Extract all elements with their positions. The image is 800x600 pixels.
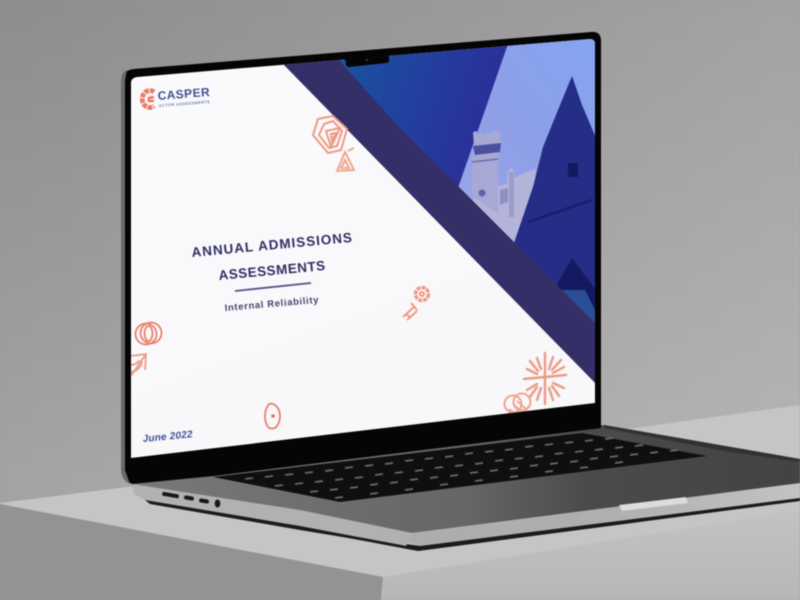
cathedral spire photo	[514, 76, 600, 334]
divider under title	[235, 283, 311, 291]
icon: small triangle	[337, 148, 354, 171]
logo tagline: ACTOR ASSESSMENTS	[159, 100, 210, 108]
keyboard well	[213, 433, 707, 502]
dark rear right of deck	[604, 425, 800, 462]
table	[0, 405, 800, 600]
logo wordmark: CASPER	[157, 85, 210, 103]
castle tower photo	[472, 131, 501, 214]
silver front edge	[406, 483, 800, 546]
camera notch	[345, 54, 389, 67]
navy diagonal band	[283, 58, 600, 388]
title line 1: ANNUAL ADMISSIONS	[191, 230, 353, 260]
icon: oval with dot	[265, 404, 280, 428]
date: June 2022	[142, 429, 193, 445]
icon: corner arrow	[131, 354, 146, 376]
icon: hexagon knot	[313, 116, 347, 153]
trackpad notch	[619, 497, 688, 511]
laptop lid	[123, 32, 601, 484]
sky panel	[458, 38, 596, 200]
castle buildings photo	[472, 168, 536, 242]
subtitle: Internal Reliability	[224, 295, 320, 314]
icon: flower and key	[403, 288, 428, 320]
logo mark	[142, 90, 154, 108]
screen slide	[120, 30, 610, 470]
logo: Casper	[142, 85, 210, 108]
title line 2: ASSESSMENTS	[218, 258, 326, 283]
silver left side	[132, 484, 412, 546]
title	[191, 230, 353, 283]
icon: interlaced heart	[504, 394, 530, 417]
keyboard keys	[245, 438, 678, 498]
laptop base	[132, 425, 800, 551]
icon: starburst	[524, 353, 566, 404]
icon: overlapping circles	[136, 322, 162, 344]
bottom shadow	[300, 498, 800, 551]
deck	[132, 425, 800, 533]
slide background	[120, 30, 610, 470]
lid edge highlight	[121, 70, 130, 484]
blue triangle panel	[336, 46, 508, 187]
ports	[162, 492, 220, 508]
